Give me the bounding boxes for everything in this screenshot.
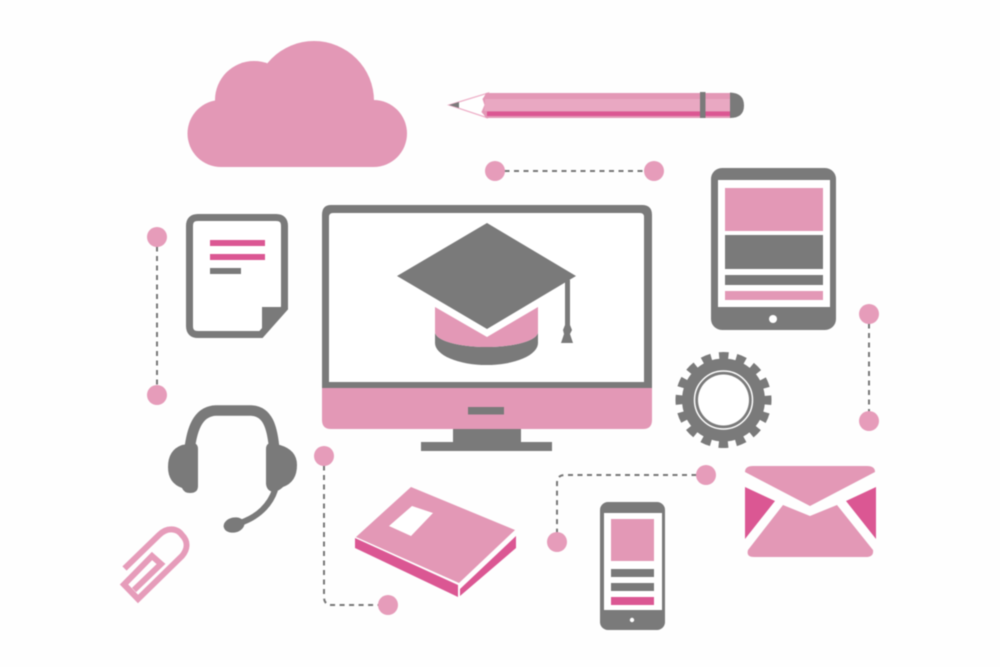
connector: right dots bbox=[859, 304, 879, 431]
icon: headset bbox=[168, 410, 297, 535]
connector: phone dots bbox=[547, 465, 716, 552]
connector: left dots bbox=[147, 227, 167, 405]
connector: top dots bbox=[485, 161, 664, 181]
icon: tablet bbox=[711, 168, 836, 330]
icon: cloud bbox=[188, 41, 407, 167]
icon: pencil bbox=[449, 92, 744, 118]
icon: envelope bbox=[745, 466, 876, 557]
icon: smartphone bbox=[600, 502, 665, 630]
connector: book dots bbox=[314, 446, 398, 615]
icon: document bbox=[190, 218, 288, 338]
icon: gear bbox=[679, 356, 768, 444]
icon: paperclip bbox=[124, 529, 187, 599]
icon: book bbox=[355, 487, 516, 597]
icon: desktop monitor bbox=[322, 205, 652, 451]
icon: graduation cap bbox=[397, 223, 576, 365]
